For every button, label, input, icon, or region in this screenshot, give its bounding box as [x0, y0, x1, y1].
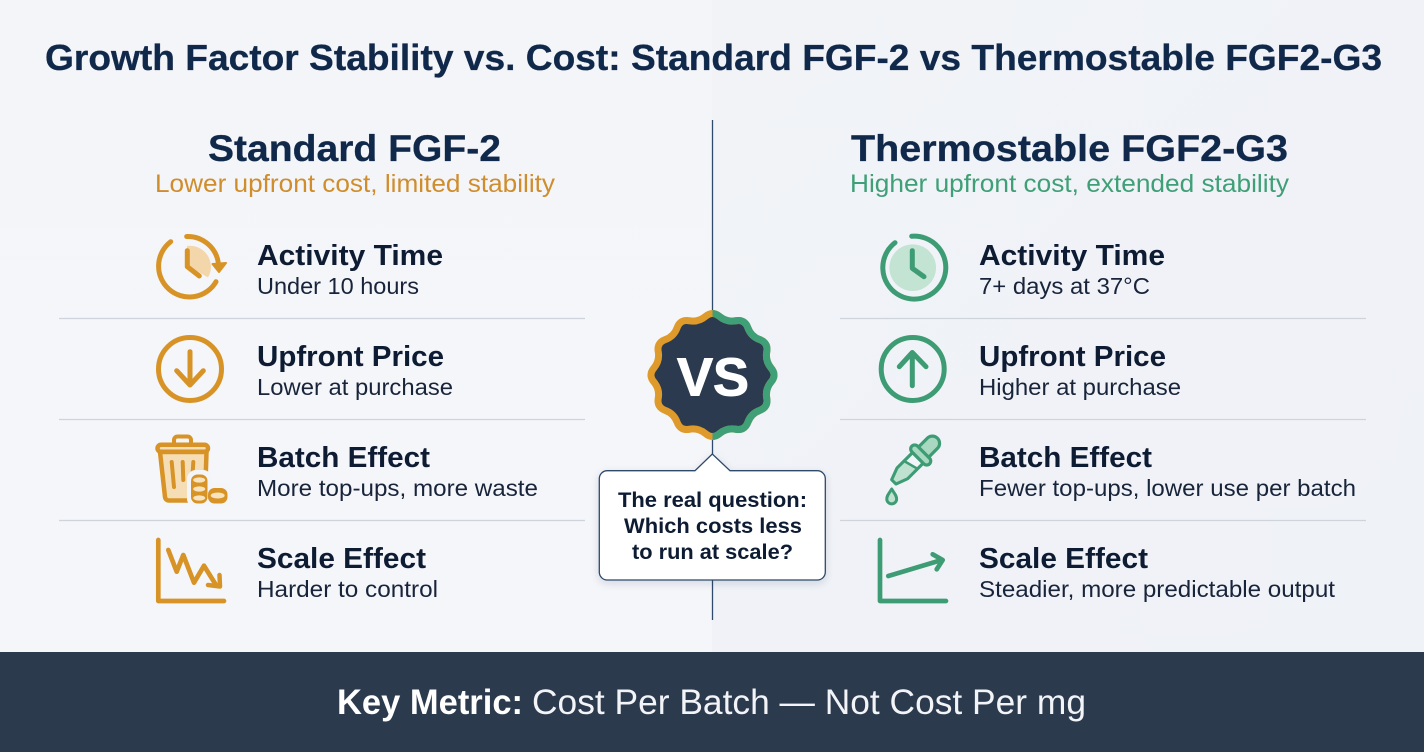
row: batch effect thermostable: Fewer top-ups, lower use per batch [979, 475, 1356, 501]
row: scale effect standard: Scale Effect [257, 543, 426, 575]
icon: rising chart [880, 540, 946, 601]
subtitle: standard: Lower upfront cost, limited stability [155, 170, 556, 198]
row: activity time standard: Activity Time [257, 240, 443, 272]
icon: trash can with coins [158, 436, 231, 506]
subtitle: thermostable: Higher upfront cost, extended stability [850, 170, 1290, 198]
title: Growth Factor Stability vs. Cost: Standard FGF-2 vs Thermostable FGF2-G3 [45, 37, 1382, 78]
icon: down arrow circle [158, 338, 222, 400]
row: scale effect thermostable: Steadier, more predictable output [979, 576, 1335, 602]
icon: clock with long arc [883, 236, 946, 299]
row: batch effect standard [257, 442, 538, 501]
row: batch effect thermostable: Batch Effect [979, 442, 1152, 474]
heading: Thermostable FGF2-G3: Thermostable FGF2-G3 [851, 128, 1288, 169]
callout: the real question: The real question: [618, 489, 807, 512]
row: scale effect standard: Harder to control [257, 576, 438, 602]
row: upfront price standard: Upfront Price [257, 341, 444, 373]
heading: Standard FGF-2: Standard FGF-2 [208, 128, 501, 169]
row: upfront price thermostable: Higher at purchase [979, 374, 1181, 400]
row: activity time thermostable: 7+ days at 37°C [979, 273, 1150, 299]
row: batch effect standard: More top-ups, more waste [257, 475, 538, 501]
row: upfront price standard: Lower at purchase [257, 374, 453, 400]
panel: Standard FGF-2 [59, 128, 585, 602]
callout: the real question [599, 454, 825, 580]
row: scale effect standard [257, 543, 438, 602]
callout: the real question: Which costs less [624, 515, 802, 538]
footer banner: key metric: Cost Per Batch — Not Cost Per mg [532, 683, 1086, 722]
icon: up arrow circle [881, 338, 944, 400]
callout: the real question: to run at scale? [632, 541, 793, 564]
center divider line [712, 120, 714, 620]
icon: dropper [885, 429, 946, 504]
row: upfront price thermostable [979, 341, 1181, 400]
row: scale effect thermostable: Scale Effect [979, 543, 1148, 575]
row: activity time thermostable: Activity Time [979, 240, 1165, 272]
row: activity time standard [257, 240, 443, 299]
VS badge [651, 313, 774, 437]
footer banner: key metric: Key Metric: [337, 683, 523, 722]
icon: falling chart [158, 540, 224, 601]
row: upfront price thermostable: Upfront Price [979, 341, 1166, 373]
icon: clock with short arc [159, 236, 226, 297]
panel: Thermostable FGF2-G3 [840, 128, 1366, 602]
row: batch effect standard: Batch Effect [257, 442, 430, 474]
footer banner: key metric [0, 652, 1424, 752]
VS badge: VS [677, 348, 749, 408]
row: batch effect thermostable [979, 442, 1356, 501]
row: upfront price standard [257, 341, 453, 400]
row: activity time standard: Under 10 hours [257, 273, 419, 299]
row: scale effect thermostable [979, 543, 1335, 602]
row: activity time thermostable [979, 240, 1165, 299]
